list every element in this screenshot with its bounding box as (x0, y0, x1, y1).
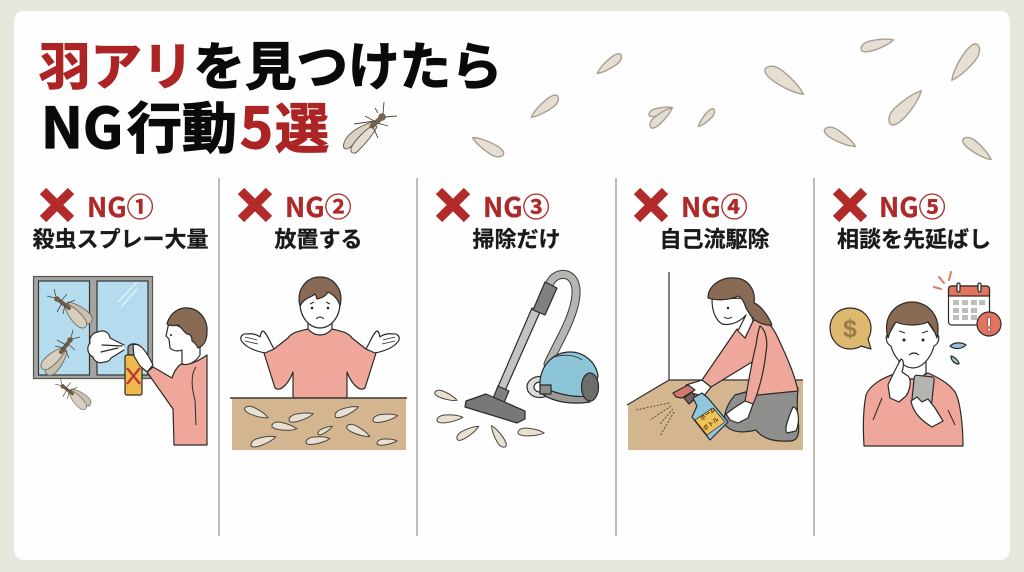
heading: NG1: NG① (87, 186, 154, 225)
heading: NG3 (439, 186, 561, 254)
title (39, 25, 503, 165)
illustration: shrugging person (241, 277, 399, 398)
illustration: spray mist (636, 403, 674, 436)
heading: NG5: NG⑤ (879, 186, 946, 225)
illustration: spray bottle with label: ボトル (701, 414, 720, 433)
heading: NG2: NG② (285, 186, 352, 225)
illustration: floor and wall (627, 272, 803, 450)
icon: calendar with alert (934, 272, 1001, 336)
heading: NG5 (836, 186, 991, 254)
illustration: worried person with phone (863, 302, 963, 446)
wings on floor (434, 389, 544, 449)
heading: NG2: 放置する (274, 222, 363, 254)
heading: NG5: 相談を先延ばし (837, 222, 991, 254)
heading: NG4 (637, 186, 770, 254)
heading: NG3: NG③ (483, 186, 550, 225)
panel: NG1 (32, 186, 209, 445)
illustration: vacuum cleaner (465, 274, 598, 423)
illustration: spray bottle with label (673, 385, 728, 440)
illustration: spray bottle with label: ホーム (698, 405, 717, 423)
title: 5 (240, 84, 273, 165)
heading: NG3: 掃除だけ (472, 222, 561, 254)
title: 行動 (127, 84, 237, 164)
heading: NG1: 殺虫スプレー大量 (32, 222, 209, 254)
panel: NG4 (627, 186, 803, 450)
panel: NG3 (434, 186, 598, 449)
heading: NG2 (241, 186, 363, 254)
icon: calendar with alert: ! (986, 315, 992, 336)
illustration: table with wings (230, 398, 407, 450)
illustration: window with ants (34, 276, 152, 410)
panel: NG2 (230, 186, 407, 450)
title: 羽アリを見つけたら (39, 25, 503, 100)
icon: money speech bubble: $ (843, 315, 857, 343)
icon: winged ant beside title (343, 102, 397, 153)
heading: NG1 (32, 186, 209, 254)
panel: NG5 (830, 186, 1001, 446)
icon: sweat drops (950, 343, 966, 364)
heading: NG4: 自己流駆除 (659, 222, 770, 254)
illustration: person spraying (133, 308, 207, 445)
heading: NG4: NG④ (681, 186, 748, 225)
title: NG (41, 84, 123, 165)
title: 選 (275, 85, 329, 164)
column dividers (219, 178, 814, 536)
illustration: spray can (125, 344, 142, 395)
illustration: spray cloud (88, 331, 124, 363)
illustration: kneeling person (686, 278, 799, 441)
scattered wings top right (470, 34, 995, 163)
icon: money speech bubble (830, 308, 871, 349)
